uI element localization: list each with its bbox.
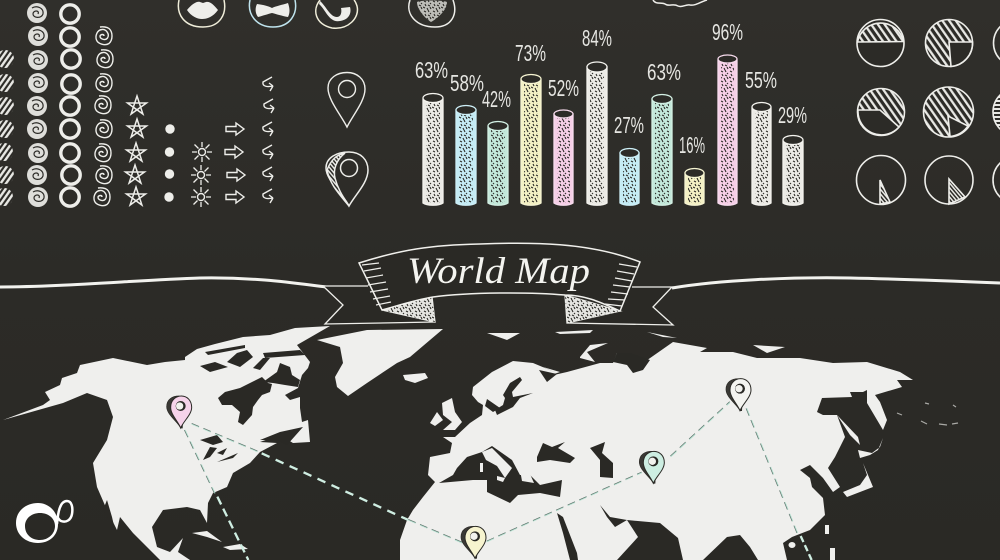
- percent labels: 16%: [679, 132, 705, 158]
- icon: outline map pin: [328, 72, 365, 127]
- hatched scribble column: [0, 50, 14, 206]
- percent labels: 27%: [614, 112, 644, 138]
- percent labels: 58%: [450, 70, 484, 96]
- filled scribble circles column: [27, 3, 48, 207]
- land: Great Britain: [442, 398, 462, 430]
- title ribbon: [323, 243, 673, 325]
- ribbon left stripes: [362, 263, 391, 305]
- pin: yellow: [461, 526, 486, 558]
- pin: green: [639, 451, 664, 483]
- pie: thin slice: [856, 156, 906, 204]
- percent labels: 73%: [515, 40, 546, 66]
- route: pink pin to Caribbean: [184, 430, 248, 560]
- star column: [126, 96, 146, 205]
- route: green pin to white pin: [670, 402, 730, 457]
- bar 96% pink: [718, 55, 737, 205]
- icon: shaded map pin: [326, 152, 368, 206]
- ribbon title text: World Map: [407, 251, 590, 292]
- land: Ireland: [430, 412, 443, 426]
- route: white pin to south east Asia: [746, 408, 812, 560]
- bar 52% pink: [554, 110, 573, 205]
- logo loop: [57, 501, 72, 524]
- icon: heart badge: [409, 0, 455, 27]
- pie: mostly hatched: [924, 87, 974, 137]
- bar 73% yellow: [521, 74, 541, 205]
- pie: horizontal hatch right: [993, 88, 1000, 136]
- bar 63% green: [652, 94, 672, 205]
- percent labels: 42%: [482, 86, 511, 112]
- ribbon body: [359, 243, 640, 311]
- percent labels: 52%: [548, 75, 579, 101]
- icon: pipe badge: [316, 0, 357, 28]
- ribbon right tail: [567, 287, 673, 325]
- seas and lakes: [103, 345, 796, 560]
- wavy badge edge: [653, 0, 707, 7]
- pie charts: [856, 20, 1000, 204]
- horizon chalk line right: [672, 278, 1000, 288]
- pie: five eighths hatched: [858, 88, 904, 136]
- bar 42% green: [488, 122, 508, 205]
- bar 29% white: [783, 136, 803, 205]
- ribbon left fold: [382, 297, 435, 322]
- bar 63% white: [423, 94, 443, 205]
- bar 16% yellow: [685, 168, 704, 205]
- land: Greenland: [317, 329, 443, 396]
- percent labels: 55%: [745, 67, 777, 93]
- icon: lips badge: [178, 0, 225, 27]
- bar 58% blue: [456, 106, 476, 205]
- bar chart: [415, 19, 807, 205]
- ribbon right stripes: [605, 264, 637, 306]
- arrow column: [225, 123, 245, 203]
- logo: [16, 501, 72, 543]
- hook arrow column: [263, 77, 274, 203]
- dot column: [164, 124, 175, 202]
- routes and map pins: [167, 379, 812, 560]
- sun column: [191, 142, 212, 207]
- ring circles column: [60, 4, 82, 208]
- percent labels: [415, 19, 807, 158]
- bar 84% white: [587, 62, 607, 205]
- eastern scattered islands: [897, 403, 958, 425]
- pin: white: [726, 379, 751, 411]
- percent labels: 84%: [582, 25, 612, 51]
- ribbon right fold: [565, 295, 620, 323]
- pie: three quarters hatched: [926, 20, 973, 66]
- spiral column: [94, 27, 113, 206]
- bar 55% white: [752, 102, 771, 205]
- land: islands: [192, 330, 883, 560]
- percent labels: 63%: [415, 57, 448, 83]
- percent labels: 29%: [778, 102, 807, 128]
- pie: small slice: [925, 156, 973, 204]
- route: yellow pin to green pin: [487, 472, 642, 542]
- route: pink pin to yellow pin: [192, 423, 463, 543]
- pie: partial right: [994, 20, 1000, 66]
- ribbon left tail: [323, 286, 435, 324]
- world map: [3, 326, 958, 560]
- icon: bow tie badge: [249, 0, 296, 27]
- pie: half hatched: [857, 20, 904, 66]
- pin: pink: [167, 396, 192, 428]
- percent labels: 96%: [712, 19, 743, 45]
- land: Eurasia and Africa: [400, 342, 913, 560]
- land: Iceland: [403, 373, 428, 383]
- land: North America: [3, 326, 330, 560]
- pie: partial right lower: [993, 156, 1000, 204]
- percent labels: 63%: [647, 59, 681, 85]
- logo ring: [16, 503, 58, 543]
- bar 27% blue: [620, 148, 639, 205]
- land: Italy and Mediterranean islands: [480, 448, 534, 483]
- horizon chalk line left: [0, 278, 326, 287]
